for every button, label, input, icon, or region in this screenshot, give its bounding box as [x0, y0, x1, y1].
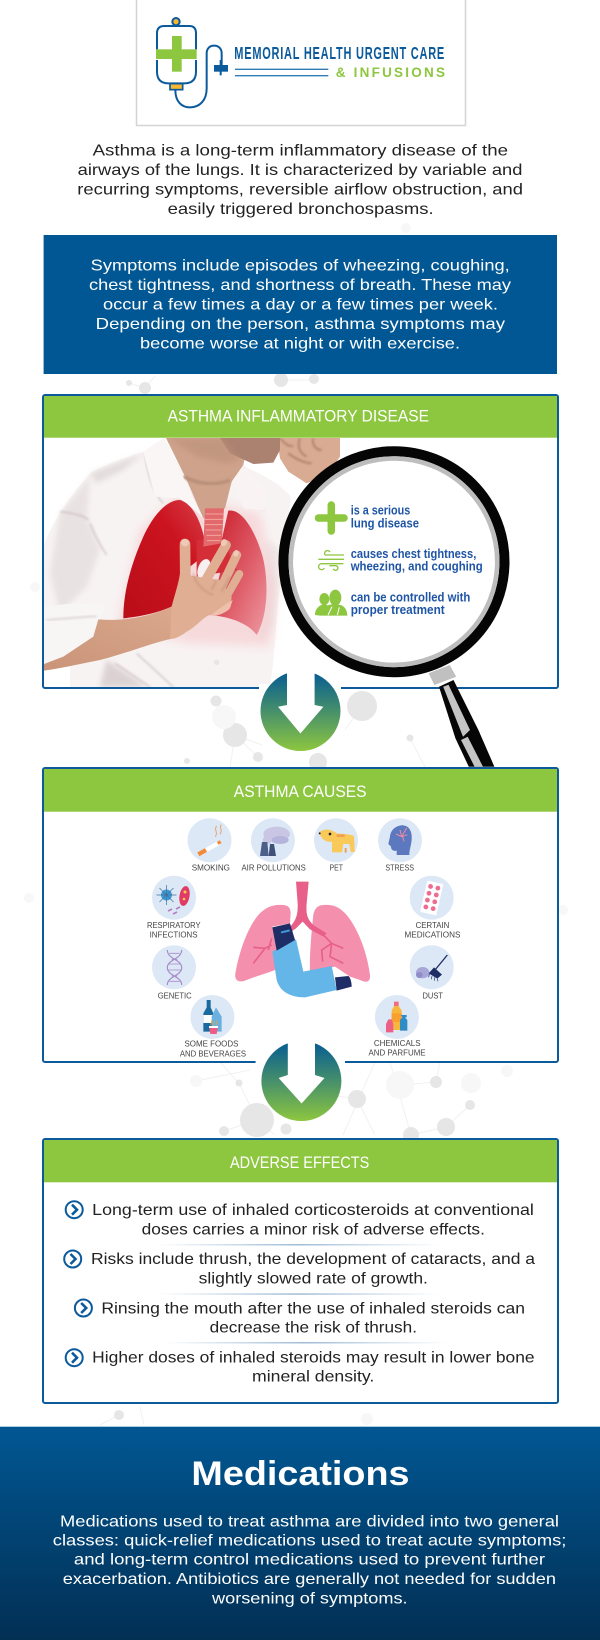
item: inhaled corticosteroids [66, 1201, 534, 1238]
item: higher doses: Higher doses of inhaled steroids may result in lower bone [92, 1349, 535, 1366]
item: risks: slightly slowed rate of growth. [199, 1270, 428, 1287]
lens text: treatment: proper treatment [351, 602, 445, 617]
logo name: MEMORIAL HEALTH URGENT CARE [234, 43, 445, 63]
cause: certain medications: CERTAIN [416, 920, 449, 930]
shirt [44, 438, 291, 687]
cause: air pollutions: AIR POLLUTIONS [242, 862, 306, 872]
trachea [290, 882, 327, 937]
item: rinsing [75, 1300, 525, 1336]
icon: IV bag logo [156, 18, 328, 107]
rolled sleeve cuff [44, 604, 98, 664]
illustration: lungs with inhaler [235, 882, 370, 997]
fist near mouth [277, 438, 340, 483]
cause: respiratory infections: RESPIRATORY [147, 920, 201, 930]
icon: green plus [318, 505, 344, 531]
right collar [242, 466, 264, 510]
bronchi [253, 935, 343, 963]
heading bar: ASTHMA CAUSES [234, 783, 367, 801]
right lung red [210, 510, 267, 635]
right lung [310, 905, 370, 982]
logo subtitle: & INFUSIONS [336, 65, 445, 80]
symptoms text: Depending on the person, asthma symptoms may [96, 316, 505, 333]
item: risks [64, 1250, 535, 1287]
lens text: treatment: can be controlled with [351, 590, 470, 604]
symptoms text: Symptoms include episodes of wheezing, coughing, [91, 257, 510, 274]
intro paragraph: easily triggered bronchospasms. [168, 201, 434, 218]
button [214, 660, 219, 665]
left lung [235, 905, 291, 981]
lens text: symptoms: wheezing, and coughing [350, 558, 483, 574]
medications text [53, 1513, 566, 1607]
neck [166, 438, 248, 518]
item: inhaled corticosteroids: doses carries a minor risk of adverse effects. [142, 1221, 485, 1238]
cause: genetic [152, 945, 196, 1000]
lens text: symptoms [350, 546, 483, 574]
medications text: exacerbation. Antibiotics are generally not needed for sudden [63, 1571, 556, 1588]
panel: asthma causes [43, 768, 558, 1066]
hand [170, 538, 240, 639]
cause: respiratory infections: INFECTIONS [150, 930, 198, 940]
gap in border for arrow [256, 1058, 345, 1066]
lens text: symptoms: causes chest tightness, [351, 546, 476, 561]
cause: genetic: GENETIC [158, 990, 192, 1000]
arrow: down to causes [260, 668, 340, 751]
cause: smoking: SMOKING [192, 862, 230, 872]
cause: certain medications: MEDICATIONS [404, 930, 461, 940]
heading bar: ADVERSE EFFECTS [230, 1154, 369, 1172]
pink glow around lungs [117, 493, 277, 647]
white oval [197, 559, 210, 578]
left collar [144, 452, 203, 518]
lens text: lung disease [351, 502, 419, 530]
icon: people [315, 590, 347, 616]
cause: smoking [188, 818, 232, 872]
intro paragraph: Asthma is a long-term inflammatory disease of the [93, 142, 508, 160]
heading bar [44, 1140, 557, 1182]
item: rinsing: decrease the risk of thrush. [210, 1319, 417, 1336]
background molecules pattern [24, 223, 568, 1425]
medications text: and long-term control medications used to prevent further [74, 1552, 546, 1569]
cause: stress [378, 818, 422, 872]
cause: some foods and beverages: SOME FOODS [184, 1039, 239, 1049]
heading: medications: Medications [191, 1455, 410, 1493]
gap in border for arrow [259, 684, 341, 692]
shirt shading [50, 453, 280, 687]
cause: air pollutions [242, 818, 306, 872]
trachea [197, 537, 237, 577]
heading bar [44, 769, 557, 812]
panel: medications [0, 1427, 600, 1640]
symptoms text: become worse at night or with exercise. [140, 335, 460, 352]
symptoms text: chest tightness, and shortness of breath. These may [89, 277, 511, 294]
panel: adverse effects [43, 1139, 558, 1403]
icon: magnifying glass [284, 451, 504, 767]
intro paragraph [77, 142, 523, 218]
item: risks: Risks include thrush, the development of cataracts, and a [91, 1251, 535, 1268]
lens text: treatment [351, 590, 470, 617]
medications text: worsening of symptoms. [211, 1590, 408, 1607]
medications text: Medications used to treat asthma are divided into two general [60, 1513, 559, 1530]
lens text: lung disease: lung disease [351, 516, 419, 530]
magnifier lens [284, 451, 504, 672]
cause: respiratory infections [147, 876, 201, 940]
item: rinsing: Rinsing the mouth after the use of inhaled steroids can [101, 1300, 525, 1317]
left lung red [123, 500, 207, 618]
intro paragraph: recurring symptoms, reversible airflow obstruction, and [77, 182, 523, 198]
icon: wind [318, 551, 344, 570]
cause: chemicals and parfume [368, 995, 426, 1058]
cause: certain medications [404, 876, 461, 940]
logo box [136, 0, 466, 126]
heading bar [44, 396, 557, 438]
lens text: lung disease: is a serious [351, 502, 410, 518]
cause: stress: STRESS [385, 862, 414, 872]
item: higher doses [66, 1349, 535, 1386]
photo: man with red lungs holding chest [44, 438, 340, 687]
intro paragraph: airways of the lungs. It is characterized by variable and [78, 162, 522, 179]
cause: pet [314, 818, 358, 872]
cause: pet: PET [330, 862, 344, 872]
symptoms text [89, 257, 511, 352]
magnifier handle [429, 665, 494, 767]
arrow: down to adverse effects [261, 1038, 341, 1121]
medications text: classes: quick-relief medications used to treat acute symptoms; [53, 1533, 566, 1550]
panel: asthma inflammatory disease [43, 395, 558, 692]
cause: chemicals and parfume: CHEMICALS [374, 1038, 421, 1048]
symptoms text: occur a few times a day or a few times per week. [103, 296, 498, 313]
heading bar: ASTHMA INFLAMMATORY DISEASE [168, 408, 429, 426]
cause: dust [410, 945, 454, 1000]
cause: chemicals and parfume: AND PARFUME [368, 1048, 426, 1058]
item: inhaled corticosteroids: Long-term use of inhaled corticosteroids at conventional [92, 1202, 534, 1219]
cause: some foods and beverages: AND BEVERAGES [180, 1048, 246, 1058]
cause: dust: DUST [422, 990, 444, 1000]
forearm [44, 606, 172, 671]
inhaler [272, 939, 337, 997]
cause: some foods and beverages [180, 995, 246, 1058]
symptoms panel [44, 235, 557, 374]
item: higher doses: mineral density. [252, 1369, 374, 1386]
